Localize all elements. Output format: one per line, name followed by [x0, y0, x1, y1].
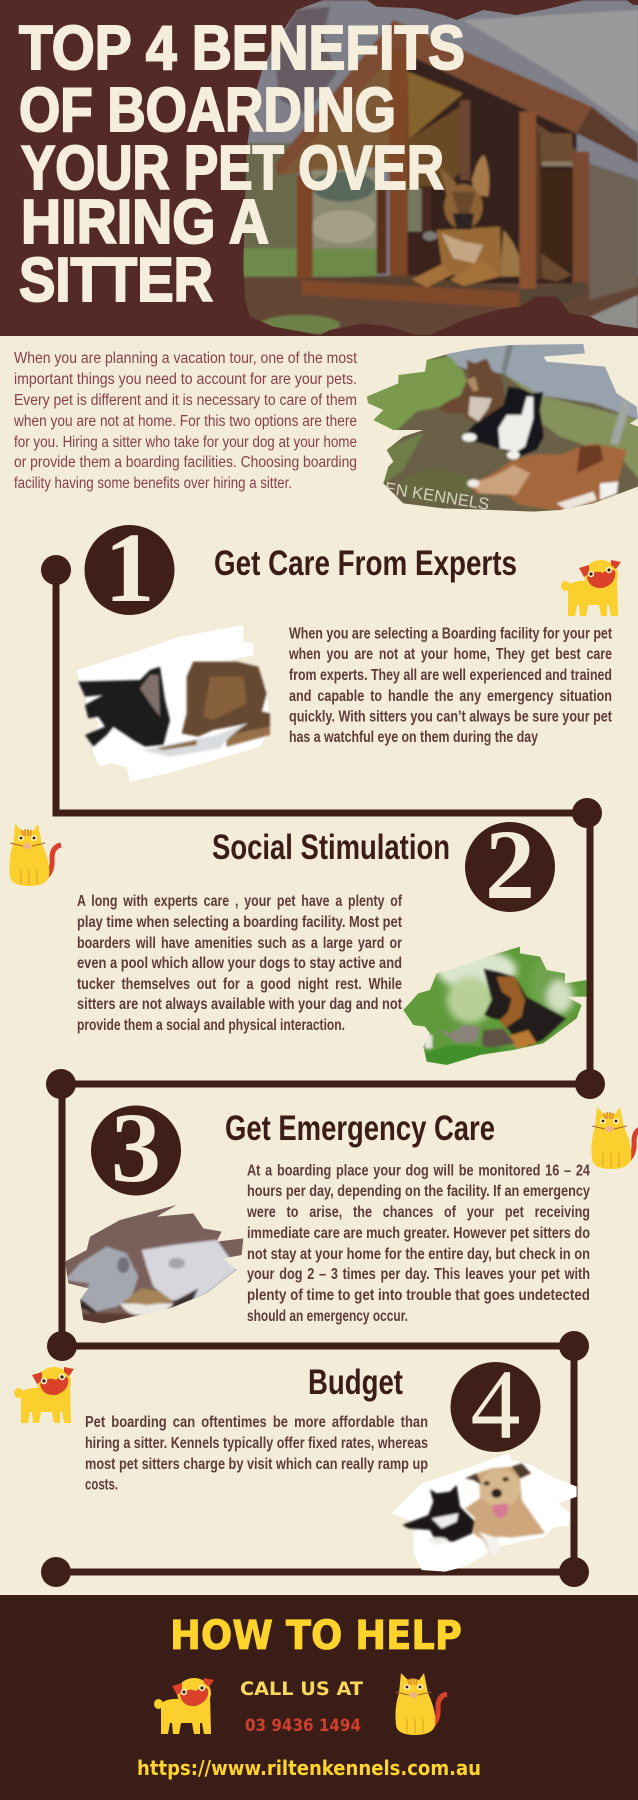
dog — [500, 230, 519, 277]
intro text: or provide them a boarding facilities. Choosing boarding — [14, 454, 357, 471]
text: step 2: provide them a social and physical interaction. — [77, 1017, 345, 1034]
title: HIRING A — [21, 188, 269, 257]
text: step 2: tucker themselves out for a good night rest. While — [77, 976, 402, 993]
icon: cat footer — [395, 1673, 447, 1735]
photo: cat and dog lying together — [392, 1453, 577, 1572]
text: step 2: A long with experts care , your pet have a plenty of — [77, 893, 403, 910]
posts — [297, 175, 313, 279]
intro text: Every pet is different and it is necessary to care of them — [14, 392, 357, 409]
floor — [302, 274, 514, 290]
text: step 1: has a watchful eye on them during the day — [289, 729, 538, 746]
heading: budget: Budget — [308, 1363, 403, 1402]
text: step 2 — [77, 893, 403, 1034]
title: SITTER — [19, 246, 213, 315]
text: step 4: hiring a sitter. Kennels typically offer fixed rates, whereas — [85, 1435, 428, 1452]
brown dog — [438, 358, 505, 423]
panel: step 2 — [77, 809, 597, 1073]
text: step 3 — [246, 1162, 590, 1325]
text: step 4 — [85, 1414, 428, 1494]
panel: step 1 — [77, 512, 621, 782]
number badge 1: 1 — [104, 512, 154, 623]
panel: step 3 — [60, 1092, 638, 1328]
photo: three dogs on grass — [360, 340, 638, 517]
panel: header — [0, 0, 638, 337]
intro text: for you. Hiring a sitter who take for your dog at your home — [14, 434, 357, 451]
shadowed interior — [390, 50, 577, 283]
number badge 4 — [450, 1349, 540, 1460]
photo: cat and puppy eating — [77, 625, 270, 782]
panel: footer — [0, 1595, 638, 1800]
outside view through opening — [312, 168, 378, 249]
phone number: 03 9436 1494 — [245, 1716, 361, 1736]
intro text: when you are not at home. For this two options are there — [13, 413, 357, 430]
icon: pug left — [14, 1367, 74, 1423]
red and white dog — [467, 443, 627, 511]
heading: get care from experts: Get Care From Experts — [214, 544, 517, 583]
website url: https://www.riltenkennels.com.au — [137, 1756, 481, 1780]
icon: pug — [561, 560, 621, 616]
text: step 4: most pet sitters charge by visit which can really ramp up — [85, 1456, 428, 1473]
number badge 3 — [91, 1092, 181, 1203]
heading: get emergency care: Get Emergency Care — [225, 1109, 495, 1148]
photo: puppy with kittens — [404, 946, 587, 1065]
photo: dog in wooden kennel — [230, 0, 638, 337]
title: TOP 4 BENEFITS — [19, 14, 465, 83]
intro text: When you are planning a vacation tour, one of the most — [14, 350, 358, 367]
icon: pug footer — [154, 1678, 214, 1734]
text: step 2: sitters are not always available with your dag and not — [77, 996, 402, 1013]
label: call us at: CALL US AT — [240, 1678, 363, 1700]
photo: three dogs on grass: EN KENNELS — [383, 479, 491, 514]
intro text: important things you need to account for are your pets. — [14, 371, 357, 388]
text: step 1 — [288, 626, 612, 746]
timeline connector — [41, 555, 605, 1587]
text: step 2: play time when selecting a boarding facility. Most pet — [77, 914, 402, 931]
number badge 2: 2 — [485, 809, 535, 920]
title: YOUR PET OVER — [21, 134, 444, 203]
roof — [577, 107, 638, 163]
number badge 2 — [465, 809, 555, 920]
text: step 3: should an emergency occur. — [247, 1308, 408, 1325]
text: step 4: costs. — [85, 1476, 118, 1494]
icon: cat left — [9, 824, 61, 886]
text: step 4: Pet boarding can oftentimes be more affordable than — [85, 1414, 428, 1431]
number badge 4: 4 — [470, 1349, 520, 1460]
number badge 1 — [84, 512, 174, 623]
title: OF BOARDING — [19, 76, 396, 145]
number badge 3: 3 — [111, 1092, 161, 1203]
intro text — [13, 350, 358, 492]
intro text: facility having some benefits over hiring a sitter. — [14, 475, 292, 492]
text: step 2: even a pool which allow your dogs to stay active and — [77, 955, 402, 972]
right wall — [589, 163, 638, 300]
heading: social stimulation: Social Stimulation — [212, 828, 450, 867]
heading: how to help: HOW TO HELP — [170, 1613, 462, 1659]
text: step 2: boarders will have amenities such as a large yard or — [77, 935, 402, 952]
icon: cat right — [591, 1107, 638, 1169]
title — [19, 14, 465, 315]
panel: step 4 — [14, 1349, 577, 1572]
black and white dog — [462, 387, 544, 457]
photo: kittens eating — [65, 1205, 244, 1324]
text: step 3: plenty of time to get into trouble that goes undetected — [247, 1287, 590, 1304]
